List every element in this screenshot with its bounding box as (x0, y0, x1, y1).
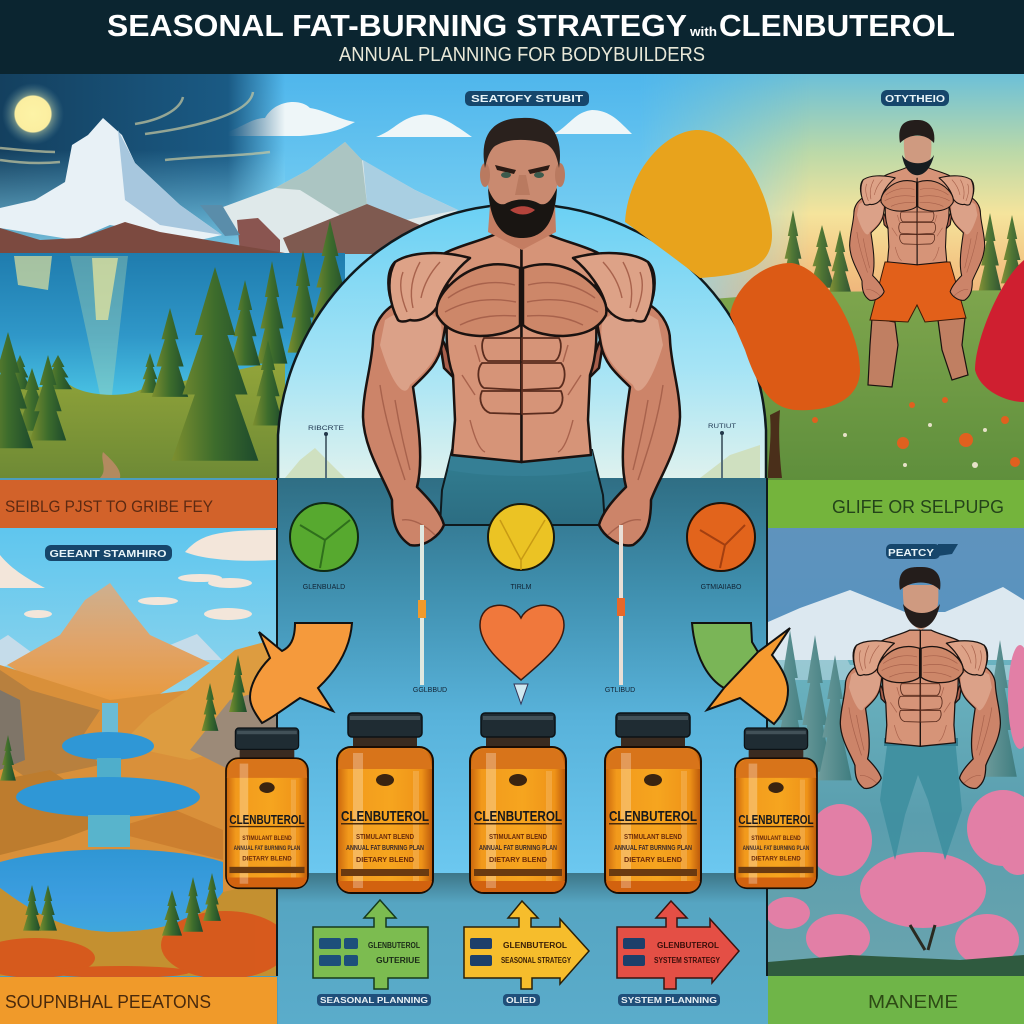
icon: yellow season circle (488, 504, 554, 591)
small gauge: upper left: RIBCRTE (308, 426, 344, 432)
bottle 4: STIMULANT BLEND (624, 834, 682, 841)
night sky (0, 74, 285, 254)
bottle 3: ANNUAL FAT BURNING PLAN (479, 845, 557, 852)
icon: left gauge stick (413, 525, 447, 694)
clouds (0, 530, 276, 620)
arrow block: red (617, 901, 739, 1006)
cloud middle (376, 114, 472, 137)
cloud right (554, 110, 632, 134)
bottle 2: CLENBUTEROL (341, 808, 429, 825)
arrow block: green: GUTERIUE (376, 956, 421, 965)
bodybuilder: spring (840, 567, 1000, 860)
label: left callout: SEIBLG PJST TO GRIBE FEY (5, 497, 213, 516)
big peak (7, 583, 210, 700)
arrow block: green: GLENBUTEROL (368, 941, 420, 950)
bottle 1 (226, 728, 308, 888)
label: bottom left callout: SOUPNBHAL PEEATONS (5, 992, 211, 1012)
small caption: bottom left (45, 545, 172, 561)
icon: left gauge stick: GGLBBUD (413, 687, 447, 694)
label: left callout (0, 480, 277, 528)
icon: orange season circle (687, 503, 755, 591)
sun (2, 83, 64, 145)
wispy clouds (0, 92, 270, 163)
autumn trees in front of arch (625, 130, 1024, 478)
icon: heart (480, 605, 564, 704)
bottle 5 (735, 728, 817, 888)
small caption: bottom right: PEATCY (888, 548, 934, 559)
small caption: top centre: SEATOFY STUBIT (471, 94, 583, 105)
cloud left (215, 102, 355, 136)
label: bottom right callout (768, 976, 1024, 1024)
title (107, 8, 955, 43)
bottle 1: CLENBUTEROL (229, 812, 305, 827)
small caption: bottom right (886, 544, 958, 559)
bodybuilder: autumn (850, 120, 985, 387)
arrow block: yellow (464, 901, 589, 1006)
icon: right gauge stick (605, 525, 635, 694)
subtitle: ANNUAL PLANNING FOR BODYBUILDERS (339, 44, 705, 66)
foreground (0, 880, 277, 976)
land (0, 645, 277, 976)
icon: yellow season circle: TIRLM (510, 584, 532, 591)
bottle 5: CLENBUTEROL (738, 812, 814, 827)
label: right callout (768, 480, 1024, 528)
header band (0, 0, 1024, 74)
bottle 1: STIMULANT BLEND (242, 835, 292, 842)
bottle 5: STIMULANT BLEND (751, 835, 801, 842)
arrow block: red: SYSTEM STRATEGY (654, 956, 721, 965)
panel: top right autumn landscape (700, 210, 1024, 480)
small caption: top right: OTYTHEIO (885, 94, 945, 105)
arrow block: green (313, 900, 431, 1006)
small gauge: upper right: RUTIUT (708, 424, 736, 430)
arrow block: green: SEASONAL PLANNING (320, 996, 428, 1005)
arrow block: red: GLENBUTEROL (657, 941, 719, 950)
meadow flowers (812, 397, 1020, 467)
panel: central bodybuilder (363, 118, 680, 545)
bottle 2: STIMULANT BLEND (356, 834, 414, 841)
icon: green season circle (290, 503, 358, 591)
river and lakes (0, 703, 223, 932)
small caption: bottom left: GEEANT STAMHIRO (50, 549, 167, 560)
central arch panel (276, 204, 768, 1024)
small gauge: upper right (708, 424, 736, 478)
arrow: left orange (250, 623, 352, 723)
bottle 3 (470, 713, 566, 893)
shorts (440, 450, 605, 525)
bottle 4: ANNUAL FAT BURNING PLAN (614, 845, 692, 852)
bottle 5: DIETARY BLEND (751, 856, 801, 863)
panel: bottom right spring blossoms (766, 528, 1024, 976)
lake (0, 253, 345, 403)
title: with (689, 24, 717, 39)
arrow block: red: SYSTEM PLANNING (621, 996, 717, 1005)
bottle 3: STIMULANT BLEND (489, 834, 547, 841)
label: bottom right callout: MANEME (868, 992, 958, 1012)
mountains (768, 587, 1024, 720)
arrow block: yellow: GLENBUTEROL (503, 941, 567, 950)
panel: bottom left autumn river (0, 528, 289, 979)
far mountain (223, 142, 458, 254)
bottle 3: DIETARY BLEND (489, 857, 547, 864)
bottle 4: DIETARY BLEND (624, 857, 682, 864)
bottle 3: CLENBUTEROL (474, 808, 562, 825)
head (480, 118, 565, 250)
main mountain (0, 118, 222, 240)
distant pines (782, 210, 1023, 293)
panel: top left mountain lake landscape (0, 74, 458, 478)
icon: right gauge stick: GTLIBUD (605, 687, 635, 694)
bottle 2: DIETARY BLEND (356, 857, 414, 864)
bottle 4: CLENBUTEROL (609, 808, 697, 825)
icon: green season circle: GLENBUALD (303, 584, 345, 591)
arrow block: yellow: SEASONAL STRATEGY (501, 956, 572, 965)
title: CLENBUTEROL (719, 8, 955, 43)
arrow: right green-orange (692, 623, 790, 724)
panel: sky backdrop with clouds (231, 74, 1024, 298)
small caption: top centre (465, 91, 589, 106)
title: SEASONAL FAT-BURNING STRATEGY (107, 8, 687, 43)
bottle 1: DIETARY BLEND (242, 856, 292, 863)
meadow (0, 360, 285, 478)
label: bottom left callout (0, 977, 277, 1024)
bottle 2: ANNUAL FAT BURNING PLAN (346, 845, 424, 852)
small far peaks (0, 635, 35, 668)
bottle 2 (337, 713, 433, 893)
bottle 4 (605, 713, 701, 893)
icon: orange season circle: GTMIAIIABO (701, 584, 742, 591)
small caption: top right (881, 90, 949, 106)
label: right callout: GLIFE OR SELPUPG (832, 497, 1004, 517)
pine trees (0, 220, 348, 461)
small gauge: upper left (308, 426, 344, 478)
arrow block: yellow: OLIED (506, 996, 536, 1005)
bottle 1: ANNUAL FAT BURNING PLAN (234, 845, 300, 852)
pink blossoms (766, 645, 1024, 966)
bottle 5: ANNUAL FAT BURNING PLAN (743, 845, 809, 852)
